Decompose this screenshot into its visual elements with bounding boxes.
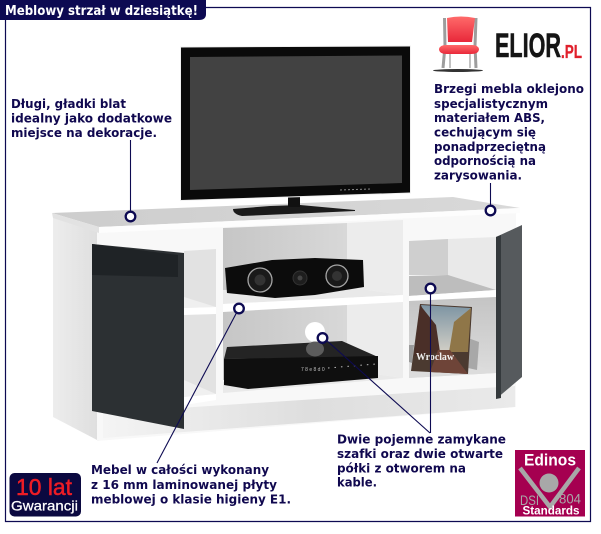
- callout: blat: idealny jako dodatkowe: [11, 110, 172, 126]
- callout: blat: Długi, gładki blat: [11, 96, 126, 111]
- callout markers: [126, 206, 495, 343]
- badge: 10 lat gwarancji: Gwarancji: [11, 498, 78, 514]
- blu-ray player: 7 8 e 8 d 0: [301, 367, 325, 373]
- badge: Edinos standards: Edinos: [524, 452, 576, 470]
- right lower compartment: [409, 297, 496, 378]
- callout: material: Mebel w całości wykonany: [91, 462, 269, 477]
- callout: storage: kable.: [337, 474, 377, 490]
- book Wroclaw: [409, 304, 479, 374]
- TV cabinet: [52, 197, 522, 441]
- callout: ABS: cechującym się: [434, 124, 536, 140]
- logo text ELIOR.PL: ELIOR: [495, 27, 561, 65]
- callout leader lines: [130, 140, 490, 463]
- icon: chair logo: [433, 16, 483, 72]
- badge: Edinos standards: [515, 450, 585, 518]
- callout: material: meblowej o klasie higieny E1.: [91, 492, 291, 506]
- badge: 10 lat gwarancji: [10, 473, 81, 516]
- cabinet left side: [53, 217, 99, 441]
- callout: ABS: odpornością na: [434, 153, 536, 168]
- right door: [496, 225, 522, 399]
- cabinet front body: [97, 212, 516, 441]
- callout: storage: szafki oraz dwie otwarte: [337, 446, 503, 461]
- callout: storage: [337, 432, 506, 490]
- callout: ABS: ponadprzeciętną: [434, 139, 546, 154]
- callout: ABS: specjalistycznym: [434, 96, 548, 111]
- cabinet top: [52, 197, 520, 227]
- callout: material: [91, 462, 291, 506]
- left door: [92, 244, 184, 429]
- callout: ABS: zarysowania.: [434, 168, 522, 182]
- plinth: [103, 386, 515, 438]
- callout: storage: półki z otworem na: [337, 460, 466, 476]
- callout: ABS: [434, 81, 584, 182]
- left compartment: [184, 249, 216, 398]
- central upper shelf compartment: [223, 223, 347, 296]
- badge: Edinos standards: DSI: [520, 493, 539, 508]
- callout: storage: Dwie pojemne zamykane: [337, 432, 506, 446]
- book Wroclaw: Wroclaw: [416, 352, 454, 363]
- right upper compartment: [409, 239, 448, 275]
- blu-ray player: [224, 341, 378, 389]
- logo text ELIOR.PL: .PL: [561, 42, 582, 62]
- badge: 10 lat gwarancji: 10 lat: [16, 474, 73, 500]
- white ball: [305, 322, 325, 342]
- central lower compartment: [223, 305, 347, 380]
- TV on stand: [180, 46, 411, 216]
- callout: ABS: materiałem ABS,: [434, 110, 545, 125]
- callout: ABS: Brzegi mebla oklejono: [434, 81, 584, 96]
- heading banner: Meblowy strzał w dziesiątkę!: [5, 4, 198, 19]
- badge: Edinos standards: 804: [559, 492, 581, 506]
- callout: blat: miejsce na dekoracje.: [11, 125, 157, 140]
- badge: Edinos standards: Standards: [522, 506, 580, 518]
- speaker on shelf: [225, 258, 364, 298]
- callout: material: z 16 mm laminowanej płyty: [91, 477, 277, 492]
- callout: blat: [11, 96, 172, 140]
